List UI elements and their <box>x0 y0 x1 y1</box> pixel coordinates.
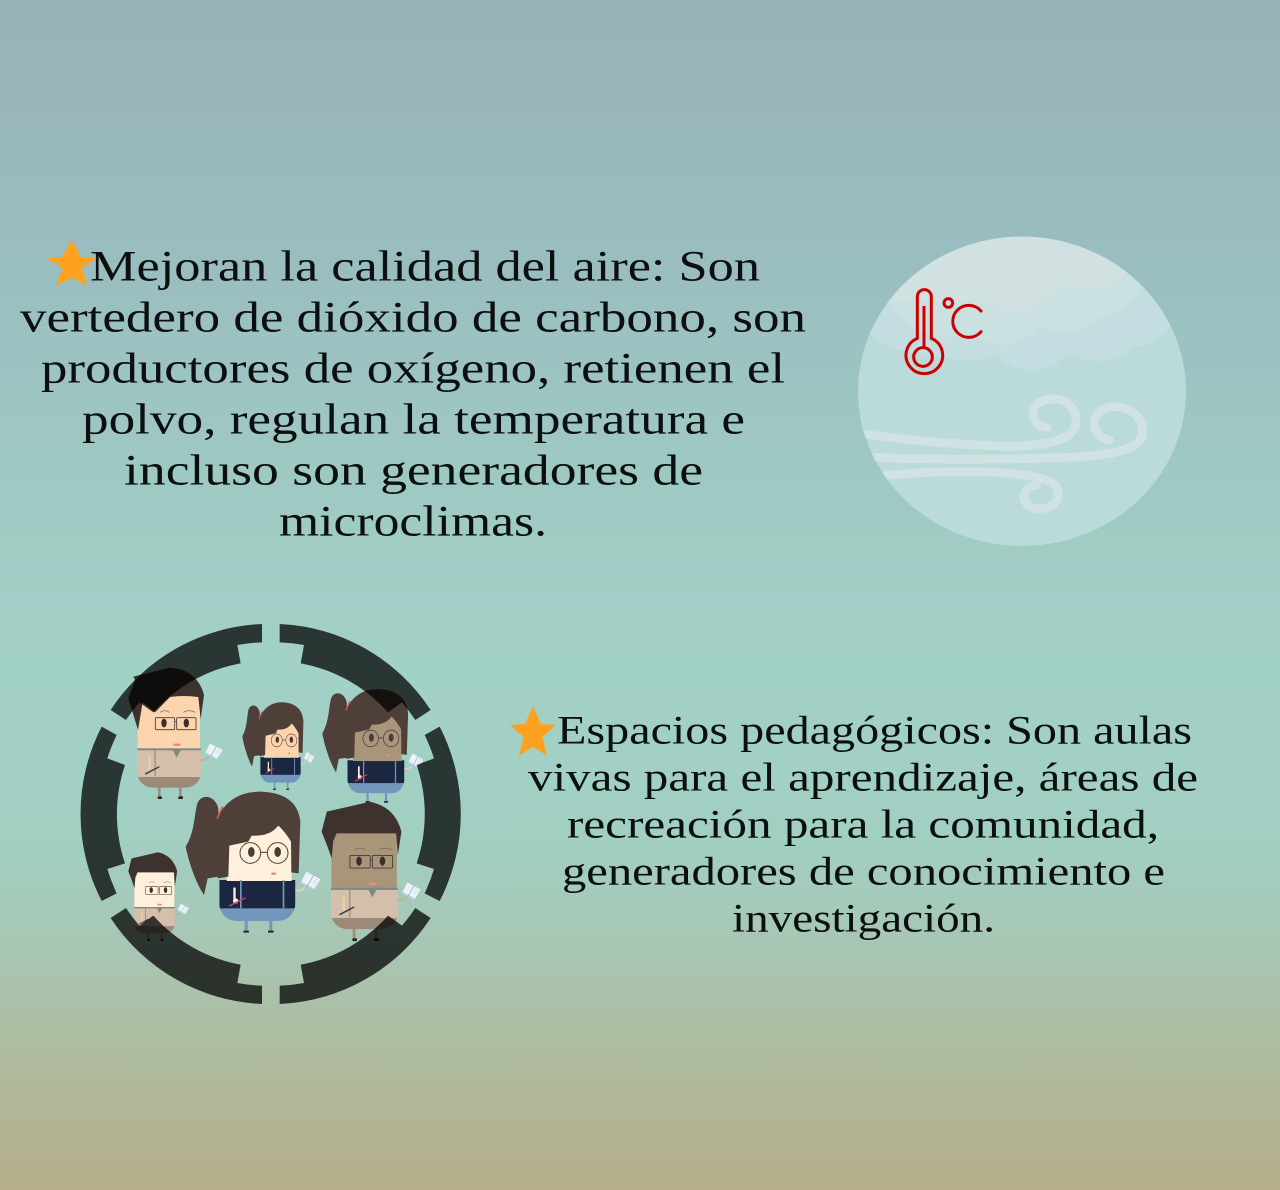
character: man bottom left <box>128 852 189 941</box>
paragraph: Mejoran la calidad del aire: productores de oxígeno, retienen el <box>41 346 785 392</box>
paragraph: Mejoran la calidad del aire: incluso son generadores de <box>124 448 703 494</box>
illustration: group of students inside a ring <box>81 624 461 1004</box>
paragraph: Mejoran la calidad del aire: vertedero de dióxido de carbono, son <box>20 294 806 342</box>
character: woman top right <box>322 689 423 803</box>
paragraph: Espacios pedagógicos: generadores de conocimiento e <box>562 848 1165 894</box>
character: man bottom right <box>322 802 421 941</box>
paragraph: Mejoran la calidad del aire: polvo, regulan la temperatura e <box>82 396 745 444</box>
paragraph: Mejoran la calidad del aire <box>20 244 806 546</box>
paragraph: Mejoran la calidad del aire: Mejoran la calidad del aire: Son <box>90 244 760 290</box>
icon: orange star, air quality <box>47 240 97 286</box>
ring segments <box>81 624 461 1004</box>
paragraph: Espacios pedagógicos <box>528 708 1198 940</box>
icon: thermometer with degrees Celsius <box>906 290 981 374</box>
clouds <box>863 236 1171 513</box>
paragraph: Espacios pedagógicos: vivas para el aprendizaje, áreas de <box>528 754 1198 800</box>
climate circle background <box>858 237 1186 546</box>
character: man top left <box>128 668 223 799</box>
paragraph: Espacios pedagógicos: investigación. <box>732 896 995 940</box>
icon: orange star, pedagogical spaces <box>510 706 556 756</box>
character: woman centre <box>186 792 321 933</box>
icon: climate circle with clouds, wind and thermometer <box>850 230 1195 546</box>
character: woman top centre <box>242 702 314 790</box>
paragraph: Espacios pedagógicos: Espacios pedagógicos: Son aulas <box>557 708 1192 752</box>
paragraph: Espacios pedagógicos: recreación para la comunidad, <box>567 802 1159 846</box>
wind swirls <box>863 399 1143 509</box>
paragraph: Mejoran la calidad del aire: microclimas. <box>279 498 547 546</box>
